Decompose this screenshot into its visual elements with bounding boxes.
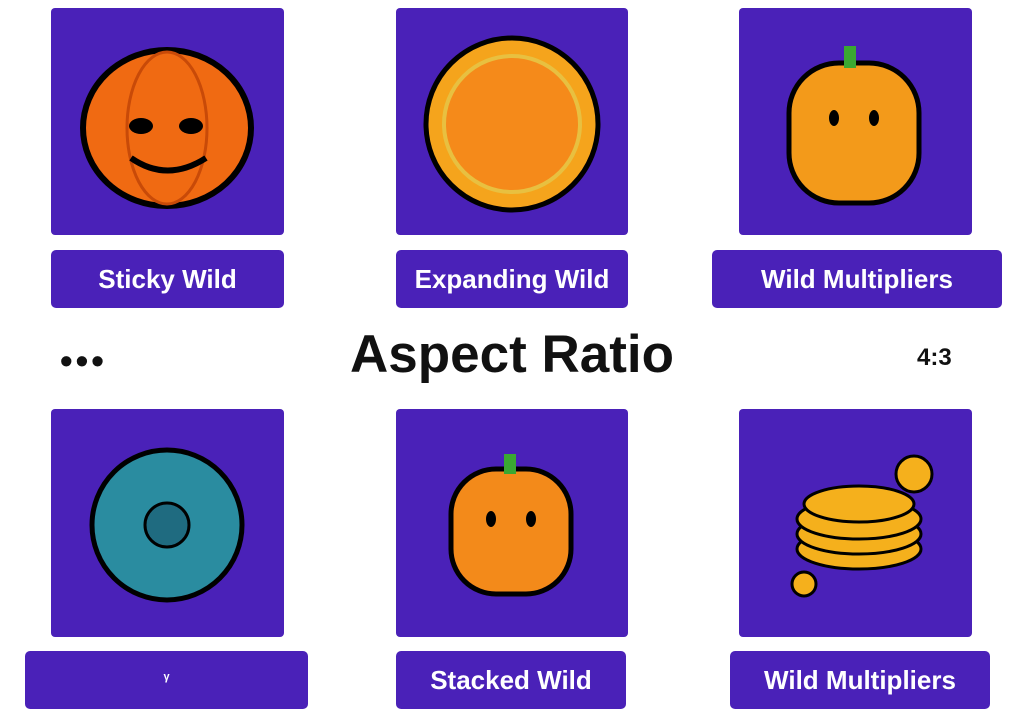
label: Expanding Wild: Expanding Wild [415, 264, 609, 294]
title: Aspect Ratio [350, 325, 674, 384]
label: Stacked Wild: Stacked Wild [430, 664, 592, 694]
label: blank [25, 651, 308, 709]
label: blank: ᵞ [164, 671, 169, 688]
tile: gold coins [739, 409, 972, 637]
ratio text: 4:3 [917, 344, 952, 371]
label: Wild Multipliers: Wild Multipliers [761, 264, 953, 294]
label: Stacked Wild [396, 651, 626, 709]
tile: stacked wild pumpkin [396, 409, 628, 637]
label: Sticky Wild [51, 250, 284, 308]
tile: sticky wild pumpkin [51, 8, 284, 235]
tile: blue wheel [51, 409, 284, 637]
label: Wild Multipliers 2: Wild Multipliers [764, 664, 956, 694]
tile: expanding wild coin [396, 8, 628, 235]
label: Wild Multipliers [712, 250, 1002, 308]
ellipsis icon: ••• [60, 340, 107, 381]
label: Sticky Wild: Sticky Wild [98, 264, 237, 294]
label: Wild Multipliers 2 [730, 651, 990, 709]
tile: wild multipliers pumpkin [739, 8, 972, 235]
label: Expanding Wild [396, 250, 628, 308]
